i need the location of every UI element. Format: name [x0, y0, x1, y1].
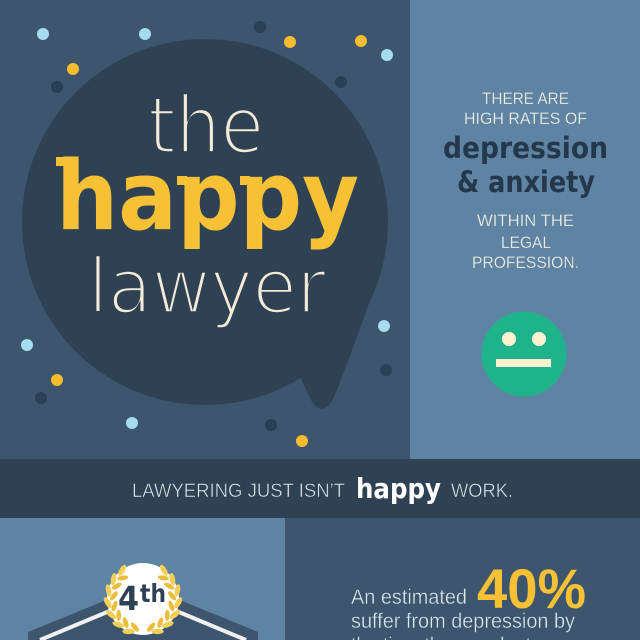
text block: high rates of depression: LEGAL — [501, 234, 551, 252]
text block: forty percent statistic: suffer from depression by — [351, 610, 575, 633]
panel: depression statistic background — [410, 0, 640, 459]
banner: happy — [356, 472, 441, 505]
panel: forty percent background — [285, 518, 640, 640]
title: the — [148, 80, 264, 172]
text block: high rates of depression: WITHIN THE — [477, 212, 574, 230]
title — [56, 80, 359, 332]
icon: neutral face — [482, 312, 566, 396]
title: happy — [56, 142, 359, 252]
panel: ranking background — [0, 518, 285, 640]
icon: laurel badge: 4 — [118, 579, 139, 618]
icon: ranking roof — [28, 585, 258, 640]
panel: title background — [0, 0, 410, 459]
banner: LAWYERING JUST ISN’T — [132, 481, 345, 502]
speech bubble — [22, 39, 388, 409]
text block: forty percent statistic: An estimated — [351, 586, 467, 609]
icon: laurel badge — [101, 562, 185, 640]
text block: high rates of depression: depression — [443, 131, 608, 165]
text block: forty percent statistic: 40% — [477, 557, 586, 620]
text block: high rates of depression: PROFESSION. — [472, 254, 579, 272]
text block: high rates of depression: THERE ARE — [482, 90, 569, 108]
text block: high rates of depression: HIGH RATES OF — [464, 110, 587, 128]
title: lawyer — [88, 243, 326, 332]
confetti dots — [21, 21, 393, 447]
text block: high rates of depression — [443, 90, 608, 272]
text block: high rates of depression: & anxiety — [457, 165, 595, 199]
banner: WORK. — [451, 481, 513, 502]
text block: forty percent statistic — [351, 557, 586, 640]
icon: laurel badge: th — [140, 579, 166, 608]
banner — [0, 459, 640, 518]
